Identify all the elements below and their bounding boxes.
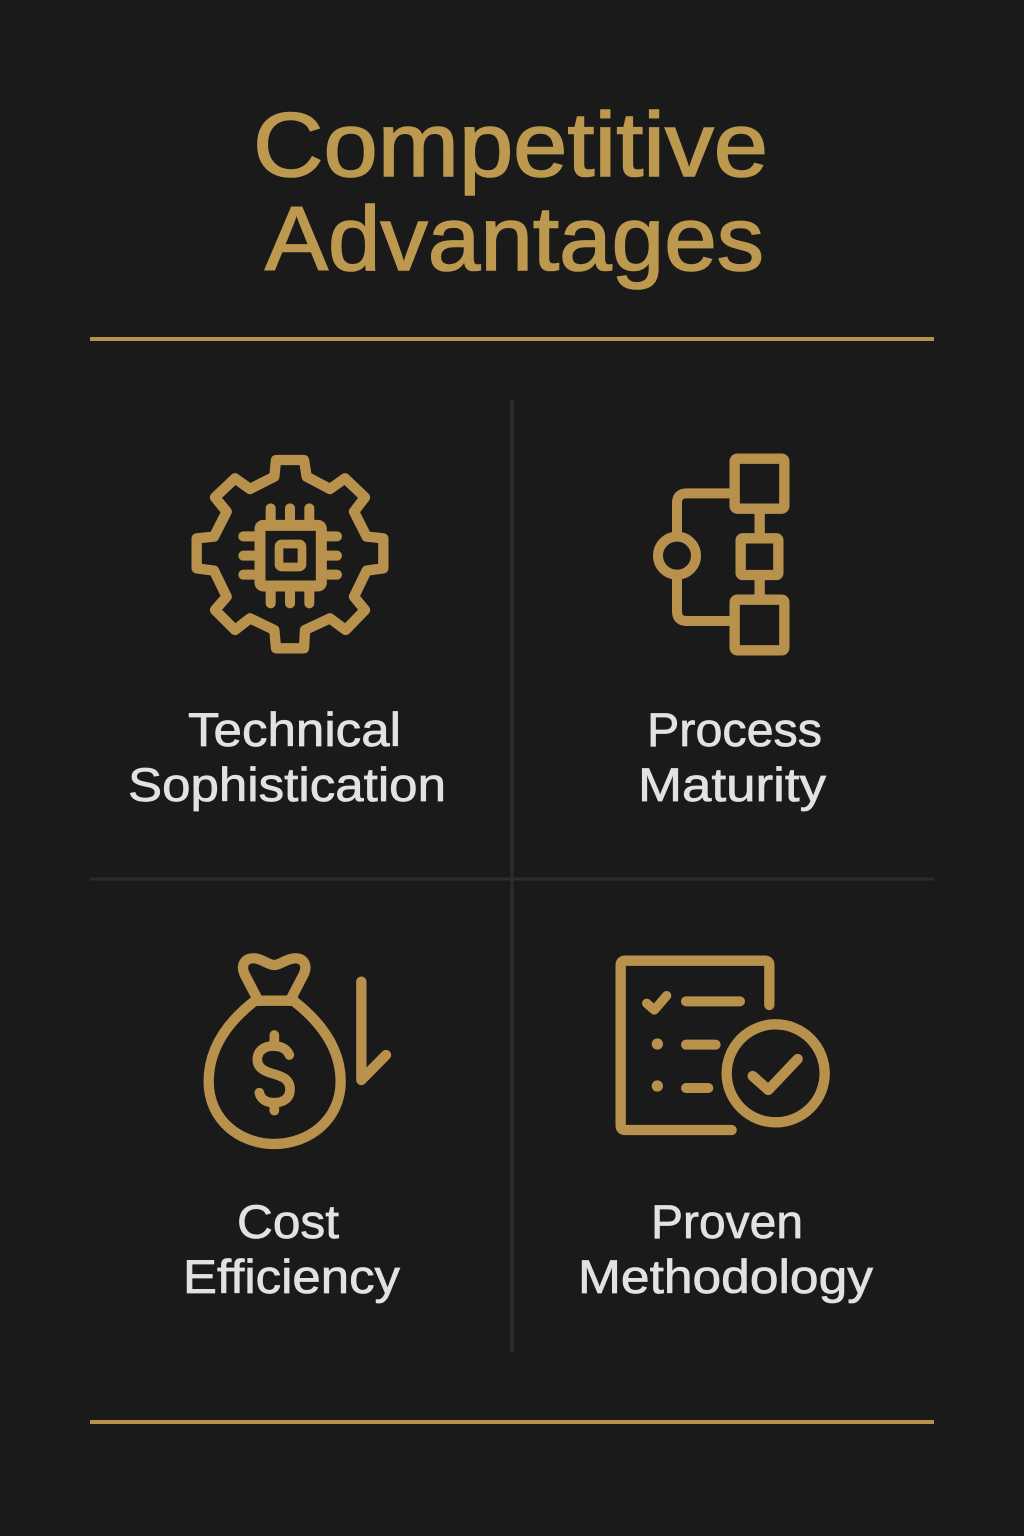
label: proven methodology [578,1195,874,1303]
title: Advantages [265,189,764,290]
panel: cost efficiency [183,958,401,1303]
label: process maturity: Maturity [638,758,827,811]
panel: proven methodology [578,961,874,1303]
label: technical sophistication: Sophistication [128,758,446,811]
icon: checklist with check badge [621,961,825,1130]
label: cost efficiency [183,1195,401,1303]
label: process maturity [638,703,827,811]
label: cost efficiency: Efficiency [183,1250,401,1303]
icon: money bag with down arrow [209,958,386,1144]
title [253,95,768,290]
panel: technical sophistication [128,460,446,811]
title: Competitive [253,95,768,196]
label: proven methodology: Proven [651,1195,803,1248]
label: proven methodology: Methodology [578,1250,874,1303]
label: cost efficiency: Cost [237,1195,339,1248]
icon: process flow diagram [658,459,784,650]
label: process maturity: Process [647,703,822,756]
icon: gear with chip [197,460,383,648]
label: technical sophistication: Technical [188,703,401,756]
panel: process maturity [638,459,827,811]
label: technical sophistication [128,703,446,811]
